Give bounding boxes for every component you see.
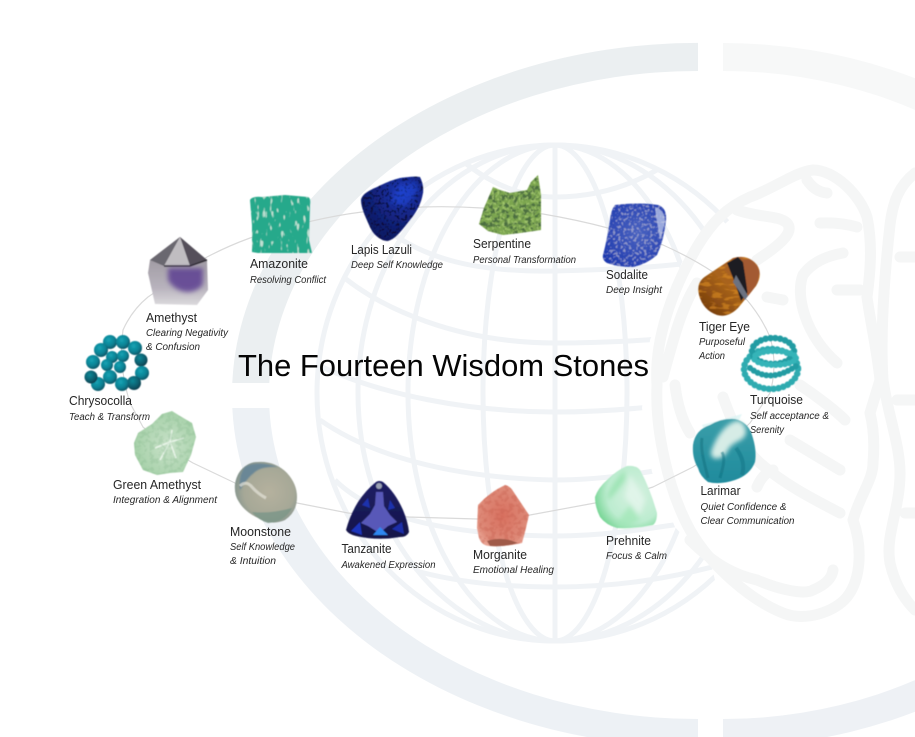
- icon: serpentine rock: [479, 175, 541, 235]
- icon: prehnite pebble: [595, 466, 657, 528]
- icon: tiger eye pebble: [698, 257, 760, 316]
- icon: moonstone pebble: [235, 462, 297, 523]
- icon: larimar pebble: [693, 414, 756, 483]
- name: Serpentine: Serpentine: [473, 237, 531, 251]
- name: Tanzanite: Tanzanite: [342, 542, 392, 556]
- icon: chrysocolla bead bracelet: [84, 335, 149, 391]
- background: globe line art: [314, 142, 729, 644]
- meaning: Self Knowledge & Intuition: [230, 542, 295, 567]
- name: Lapis Lazuli: Lapis Lazuli: [351, 243, 412, 257]
- stone: Tiger Eye: [698, 257, 760, 362]
- icon: tanzanite trillion gem: [346, 481, 409, 539]
- stone: Turquoise: [744, 338, 829, 436]
- icon: lapis lazuli pebble: [361, 177, 423, 241]
- meaning: Resolving Conflict: Resolving Conflict: [250, 275, 327, 286]
- meaning: Purposeful Action: [698, 337, 746, 362]
- stone: Larimar: [693, 414, 795, 527]
- name: Tiger Eye: Tiger Eye: [699, 320, 750, 334]
- stone: Serpentine: [473, 175, 576, 266]
- name: Morganite: Morganite: [473, 548, 527, 562]
- meaning: Clearing Negativity & Confusion: Clearing Negativity: [146, 328, 229, 339]
- name: Moonstone: Moonstone: [230, 525, 291, 539]
- meaning: Deep Insight: Deep Insight: [606, 285, 663, 296]
- thread connecting stones: [122, 207, 774, 519]
- stone: Amethyst: [146, 237, 229, 353]
- icon: amazonite block: [250, 195, 312, 253]
- icon: morganite crystal: [477, 485, 529, 546]
- name: Green Amethyst: Green Amethyst: [113, 478, 202, 492]
- background: brain line art: [657, 170, 915, 616]
- stone: Tanzanite: [341, 481, 436, 571]
- stone: Amazonite: [250, 195, 327, 286]
- icon: sodalite pebble: [603, 204, 666, 267]
- name: Prehnite: Prehnite: [606, 534, 651, 548]
- title: The Fourteen Wisdom Stones: [238, 348, 649, 383]
- meaning: Clearing Negativity & Confusion: [146, 328, 229, 353]
- stone: Moonstone: [230, 462, 297, 567]
- meaning: Teach & Transform: Teach & Transform: [69, 412, 150, 423]
- meaning: Self Knowledge & Intuition: Self Knowledge: [230, 542, 295, 553]
- stone: Lapis Lazuli: [351, 177, 443, 271]
- name: Sodalite: Sodalite: [606, 268, 648, 282]
- meaning: Deep Self Knowledge: Deep Self Knowledge: [351, 260, 443, 271]
- stone: Morganite: [473, 485, 554, 576]
- icon: amethyst crystal: [148, 237, 208, 305]
- name: Amazonite: Amazonite: [250, 257, 308, 271]
- meaning: Emotional Healing: Emotional Healing: [473, 565, 554, 576]
- meaning: Self acceptance & Serenity: Self acceptance &: [750, 411, 829, 422]
- meaning: Quiet Confidence & Clear Communication: [700, 502, 795, 527]
- stone: Prehnite: [595, 466, 667, 562]
- meaning: Purposeful Action: Action: [698, 351, 725, 362]
- background: large ring arcs: [232, 43, 915, 737]
- name: Amethyst: Amethyst: [146, 311, 198, 325]
- meaning: Quiet Confidence & Clear Communication: Clear Communication: [700, 516, 795, 527]
- meaning: Focus & Calm: Focus & Calm: [606, 551, 667, 562]
- name: Chrysocolla: Chrysocolla: [69, 394, 132, 408]
- meaning: Self acceptance & Serenity: [750, 411, 829, 436]
- meaning: Personal Transformation: Personal Transformation: [473, 255, 576, 266]
- stone: Sodalite: [603, 204, 666, 296]
- meaning: Quiet Confidence & Clear Communication: Quiet Confidence &: [700, 502, 787, 513]
- meaning: Clearing Negativity & Confusion: & Confusion: [146, 342, 200, 353]
- icon: green amethyst rough crystal: [134, 411, 196, 475]
- meaning: Integration & Alignment: Integration & Alignment: [113, 495, 218, 506]
- name: Larimar: Larimar: [700, 484, 740, 498]
- meaning: Self acceptance & Serenity: Serenity: [750, 425, 785, 436]
- meaning: Awakened Expression: Awakened Expression: [341, 560, 436, 571]
- meaning: Purposeful Action: Purposeful: [699, 337, 746, 348]
- stone: Chrysocolla: [69, 335, 150, 423]
- icon: turquoise bead strand: [744, 338, 798, 389]
- stone: Green Amethyst: [113, 411, 218, 506]
- meaning: Self Knowledge & Intuition: & Intuition: [230, 556, 276, 567]
- name: Turquoise: Turquoise: [750, 393, 803, 407]
